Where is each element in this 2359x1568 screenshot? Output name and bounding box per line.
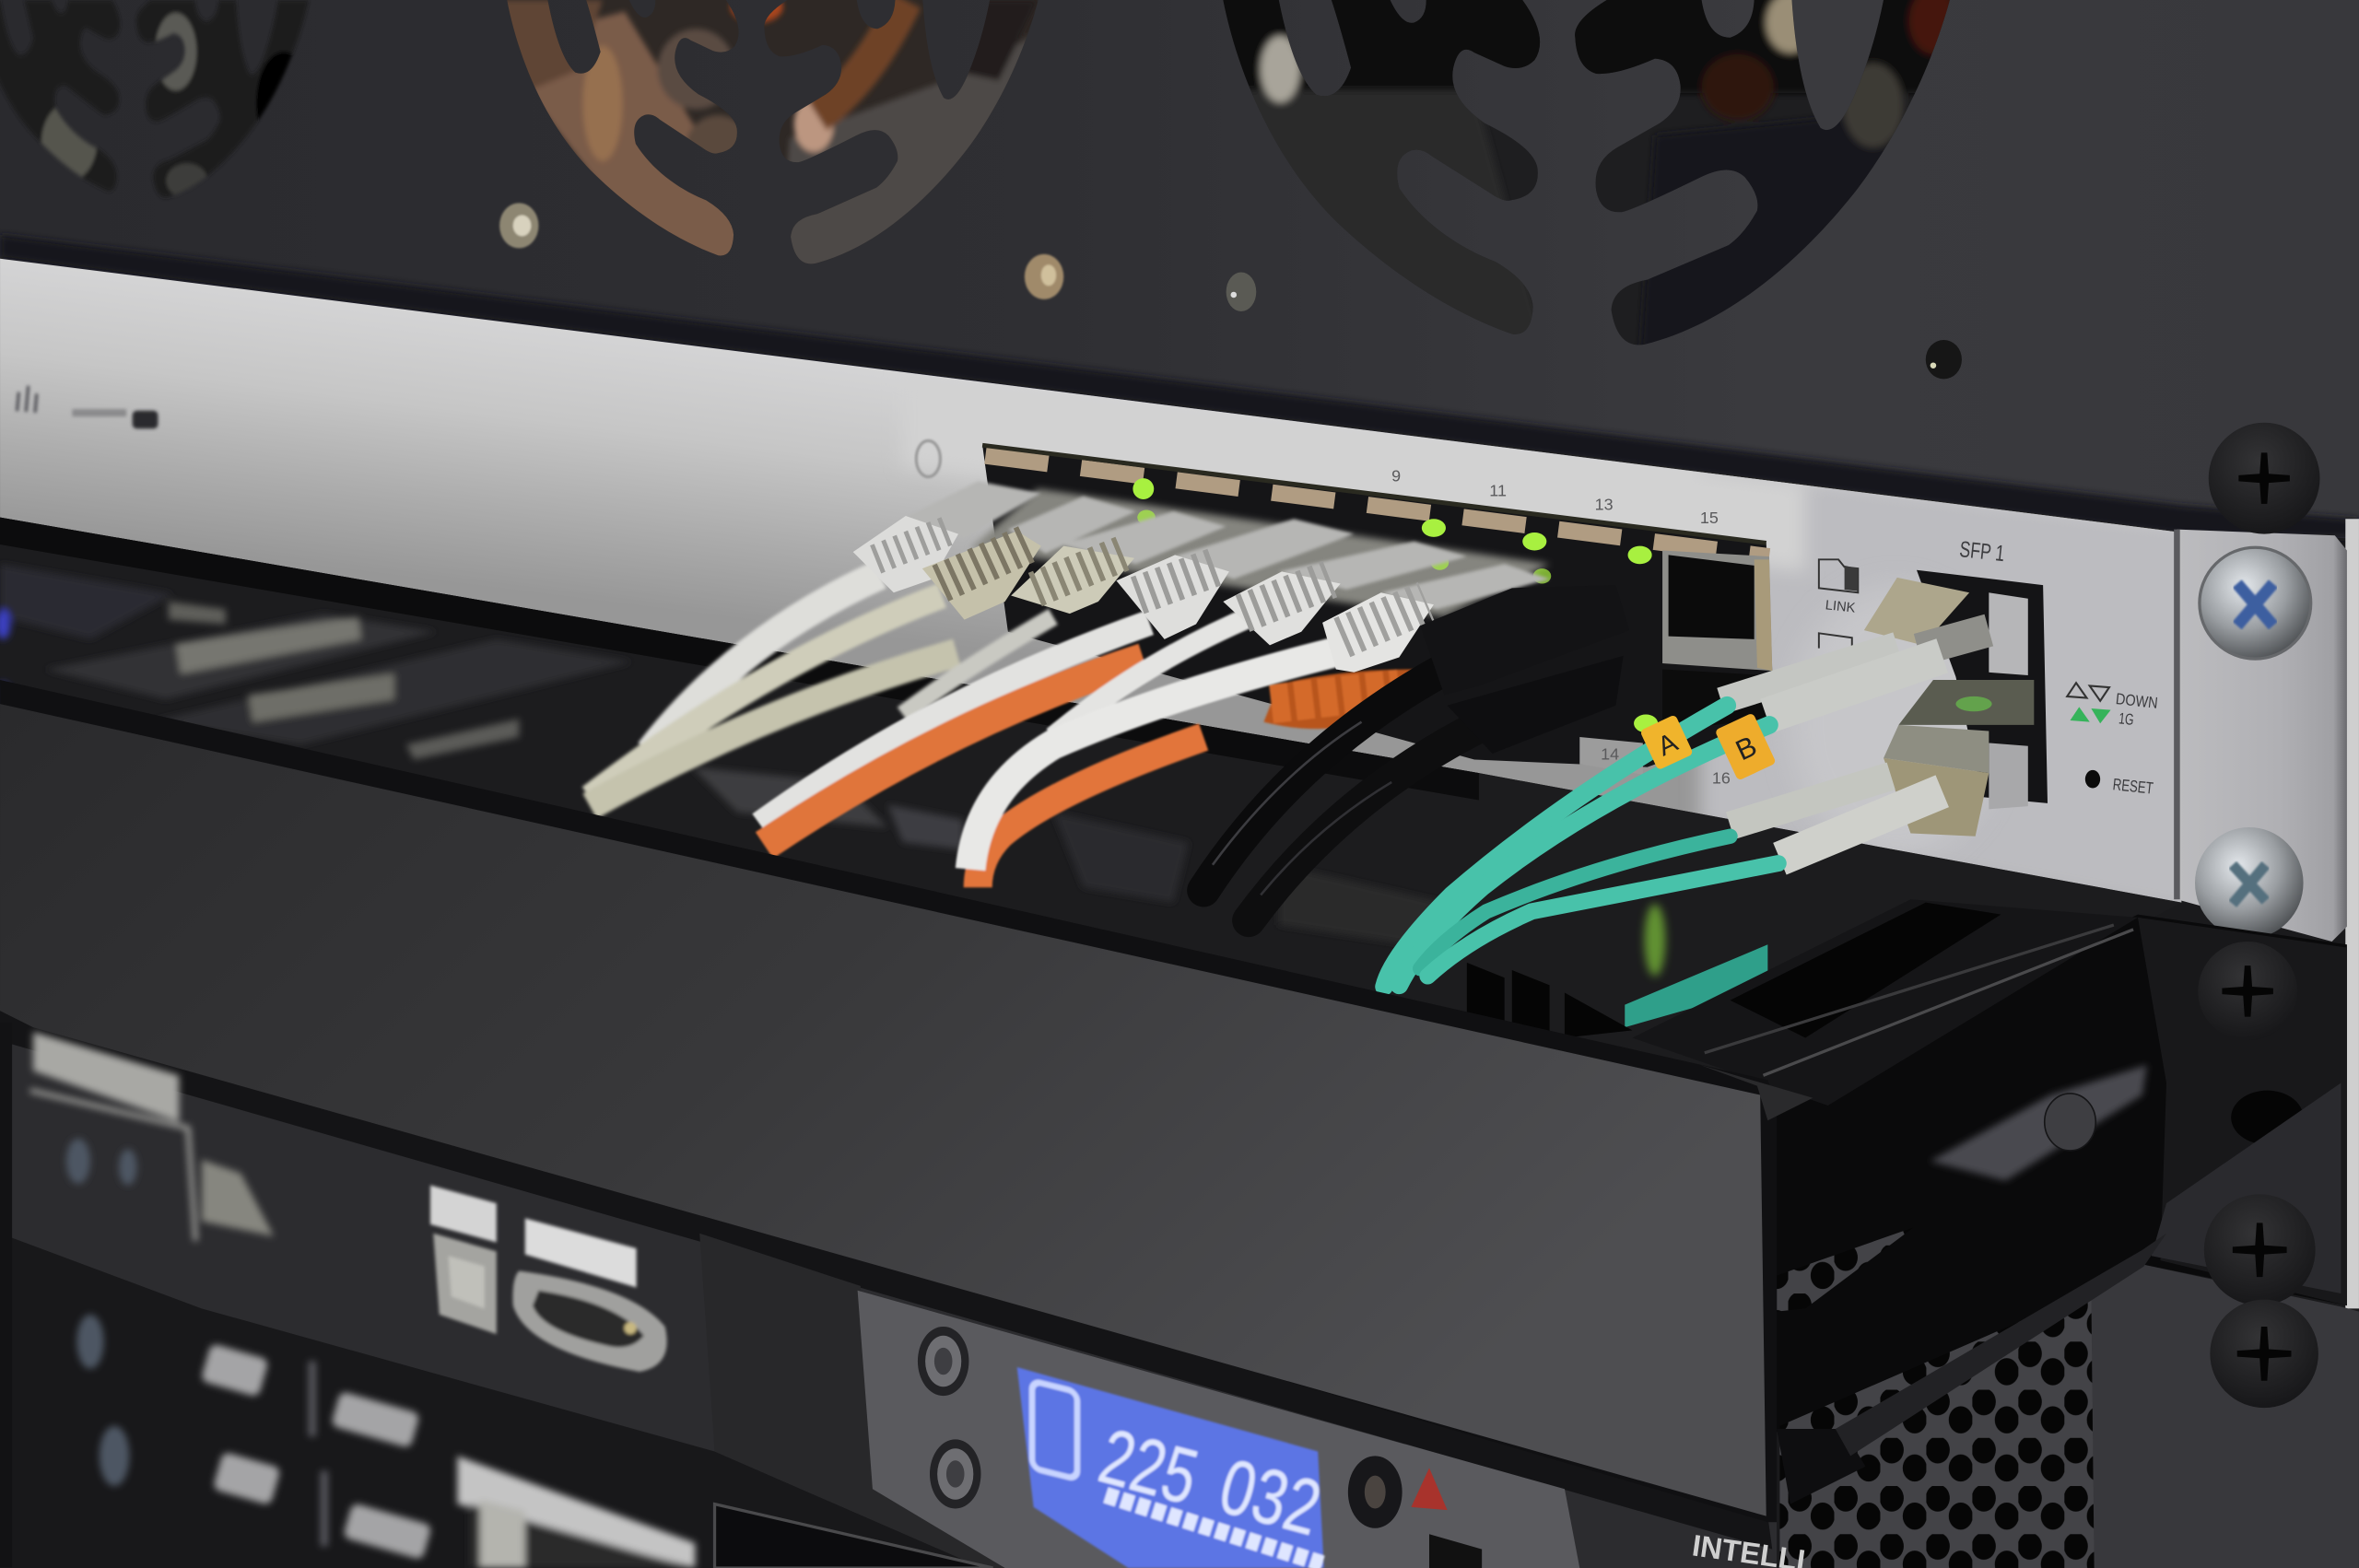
port numbers: 15 — [1700, 509, 1719, 527]
teal fibre cables — [1384, 706, 1778, 1027]
SFP cage and fibre connectors — [1721, 570, 2048, 859]
bottom silver screw — [2195, 827, 2304, 939]
left fan cutout — [0, 0, 325, 206]
black patch cables — [1203, 585, 1629, 920]
middle fan cutout — [507, 0, 1038, 263]
perforated vent — [1777, 1227, 2359, 1568]
port 14 label tab — [1579, 737, 1643, 775]
panel rivets — [499, 203, 1962, 379]
boot 3 — [1011, 546, 1134, 614]
port numbers: 13 — [1595, 495, 1614, 513]
logo on faceplate — [11, 380, 158, 428]
port numbers: 14 — [1601, 744, 1619, 763]
right faceplate legends: RESET — [2112, 775, 2154, 798]
upper LC connector — [1864, 578, 1969, 645]
black screws — [2198, 423, 2320, 1408]
screw tray top — [2198, 942, 2297, 1041]
yellow cable labels A and B: A — [1653, 727, 1683, 762]
top silver screw — [2200, 547, 2311, 659]
orange connector boots — [1263, 670, 1414, 729]
cable manager interior — [0, 518, 2181, 1120]
beige patch cables — [590, 575, 1053, 806]
rack bracket — [2174, 519, 2359, 1308]
right faceplate legends: DOWN — [2115, 689, 2159, 712]
port numbers: 9 — [1391, 466, 1401, 485]
lower LC connector — [1884, 758, 1989, 837]
black boots — [1420, 585, 1629, 695]
screw top right — [2209, 423, 2320, 534]
boot 6 — [1322, 592, 1434, 673]
USB and serial connectors — [430, 1185, 667, 1372]
left switches and labels — [76, 1315, 695, 1568]
cable manager front face — [0, 680, 1813, 1522]
device brand outline — [30, 1032, 274, 1241]
port 15 socket — [1662, 551, 1772, 671]
logo on faceplate: ılı — [11, 380, 42, 421]
boot 2 — [922, 531, 1041, 620]
faceplate icon ring — [916, 440, 940, 477]
lower port socket — [1662, 670, 1766, 731]
boot 4 — [1116, 555, 1229, 639]
silver screws — [2195, 547, 2311, 939]
LCD display — [1017, 1367, 1330, 1568]
LCD display: 032 — [1212, 1442, 1330, 1551]
port numbers: 11 — [1489, 482, 1507, 500]
screw vent panel — [2210, 1300, 2318, 1408]
right faceplate legends: 1G — [2118, 708, 2135, 729]
LCD display: 225 — [1091, 1411, 1206, 1521]
port numbers — [1391, 466, 1731, 788]
panel buttons — [918, 1327, 1482, 1568]
port numbers: 16 — [1712, 769, 1731, 788]
screw tray bottom — [2204, 1194, 2316, 1305]
boot 5 — [1223, 571, 1341, 645]
switch port block — [970, 445, 1772, 788]
lower display frame — [715, 1504, 993, 1568]
orange and white patch cables — [760, 614, 1351, 887]
right faceplate legends — [1819, 537, 2159, 798]
boot 1 — [853, 516, 958, 592]
right faceplate legends: SFP 1 — [1958, 537, 2006, 567]
right fan cutout — [1224, 0, 1950, 345]
cable manager tray right side — [1467, 899, 2347, 1432]
RJ45 white and beige boots — [853, 516, 1434, 673]
yellow cable labels A and B: B — [1731, 730, 1762, 766]
silver switch faceplate — [0, 259, 2197, 918]
lower rack device — [0, 1000, 1807, 1568]
tray fingers — [1467, 963, 1632, 1038]
link LEDs — [1133, 478, 1658, 732]
RJ45 connector bodies — [903, 481, 1550, 609]
top fan panel — [0, 0, 2359, 538]
UPS control panel — [858, 1291, 1579, 1568]
right faceplate legends: LINK — [1825, 598, 1856, 616]
yellow cable labels A and B — [1639, 712, 1777, 781]
cable finger slots — [0, 564, 1444, 948]
